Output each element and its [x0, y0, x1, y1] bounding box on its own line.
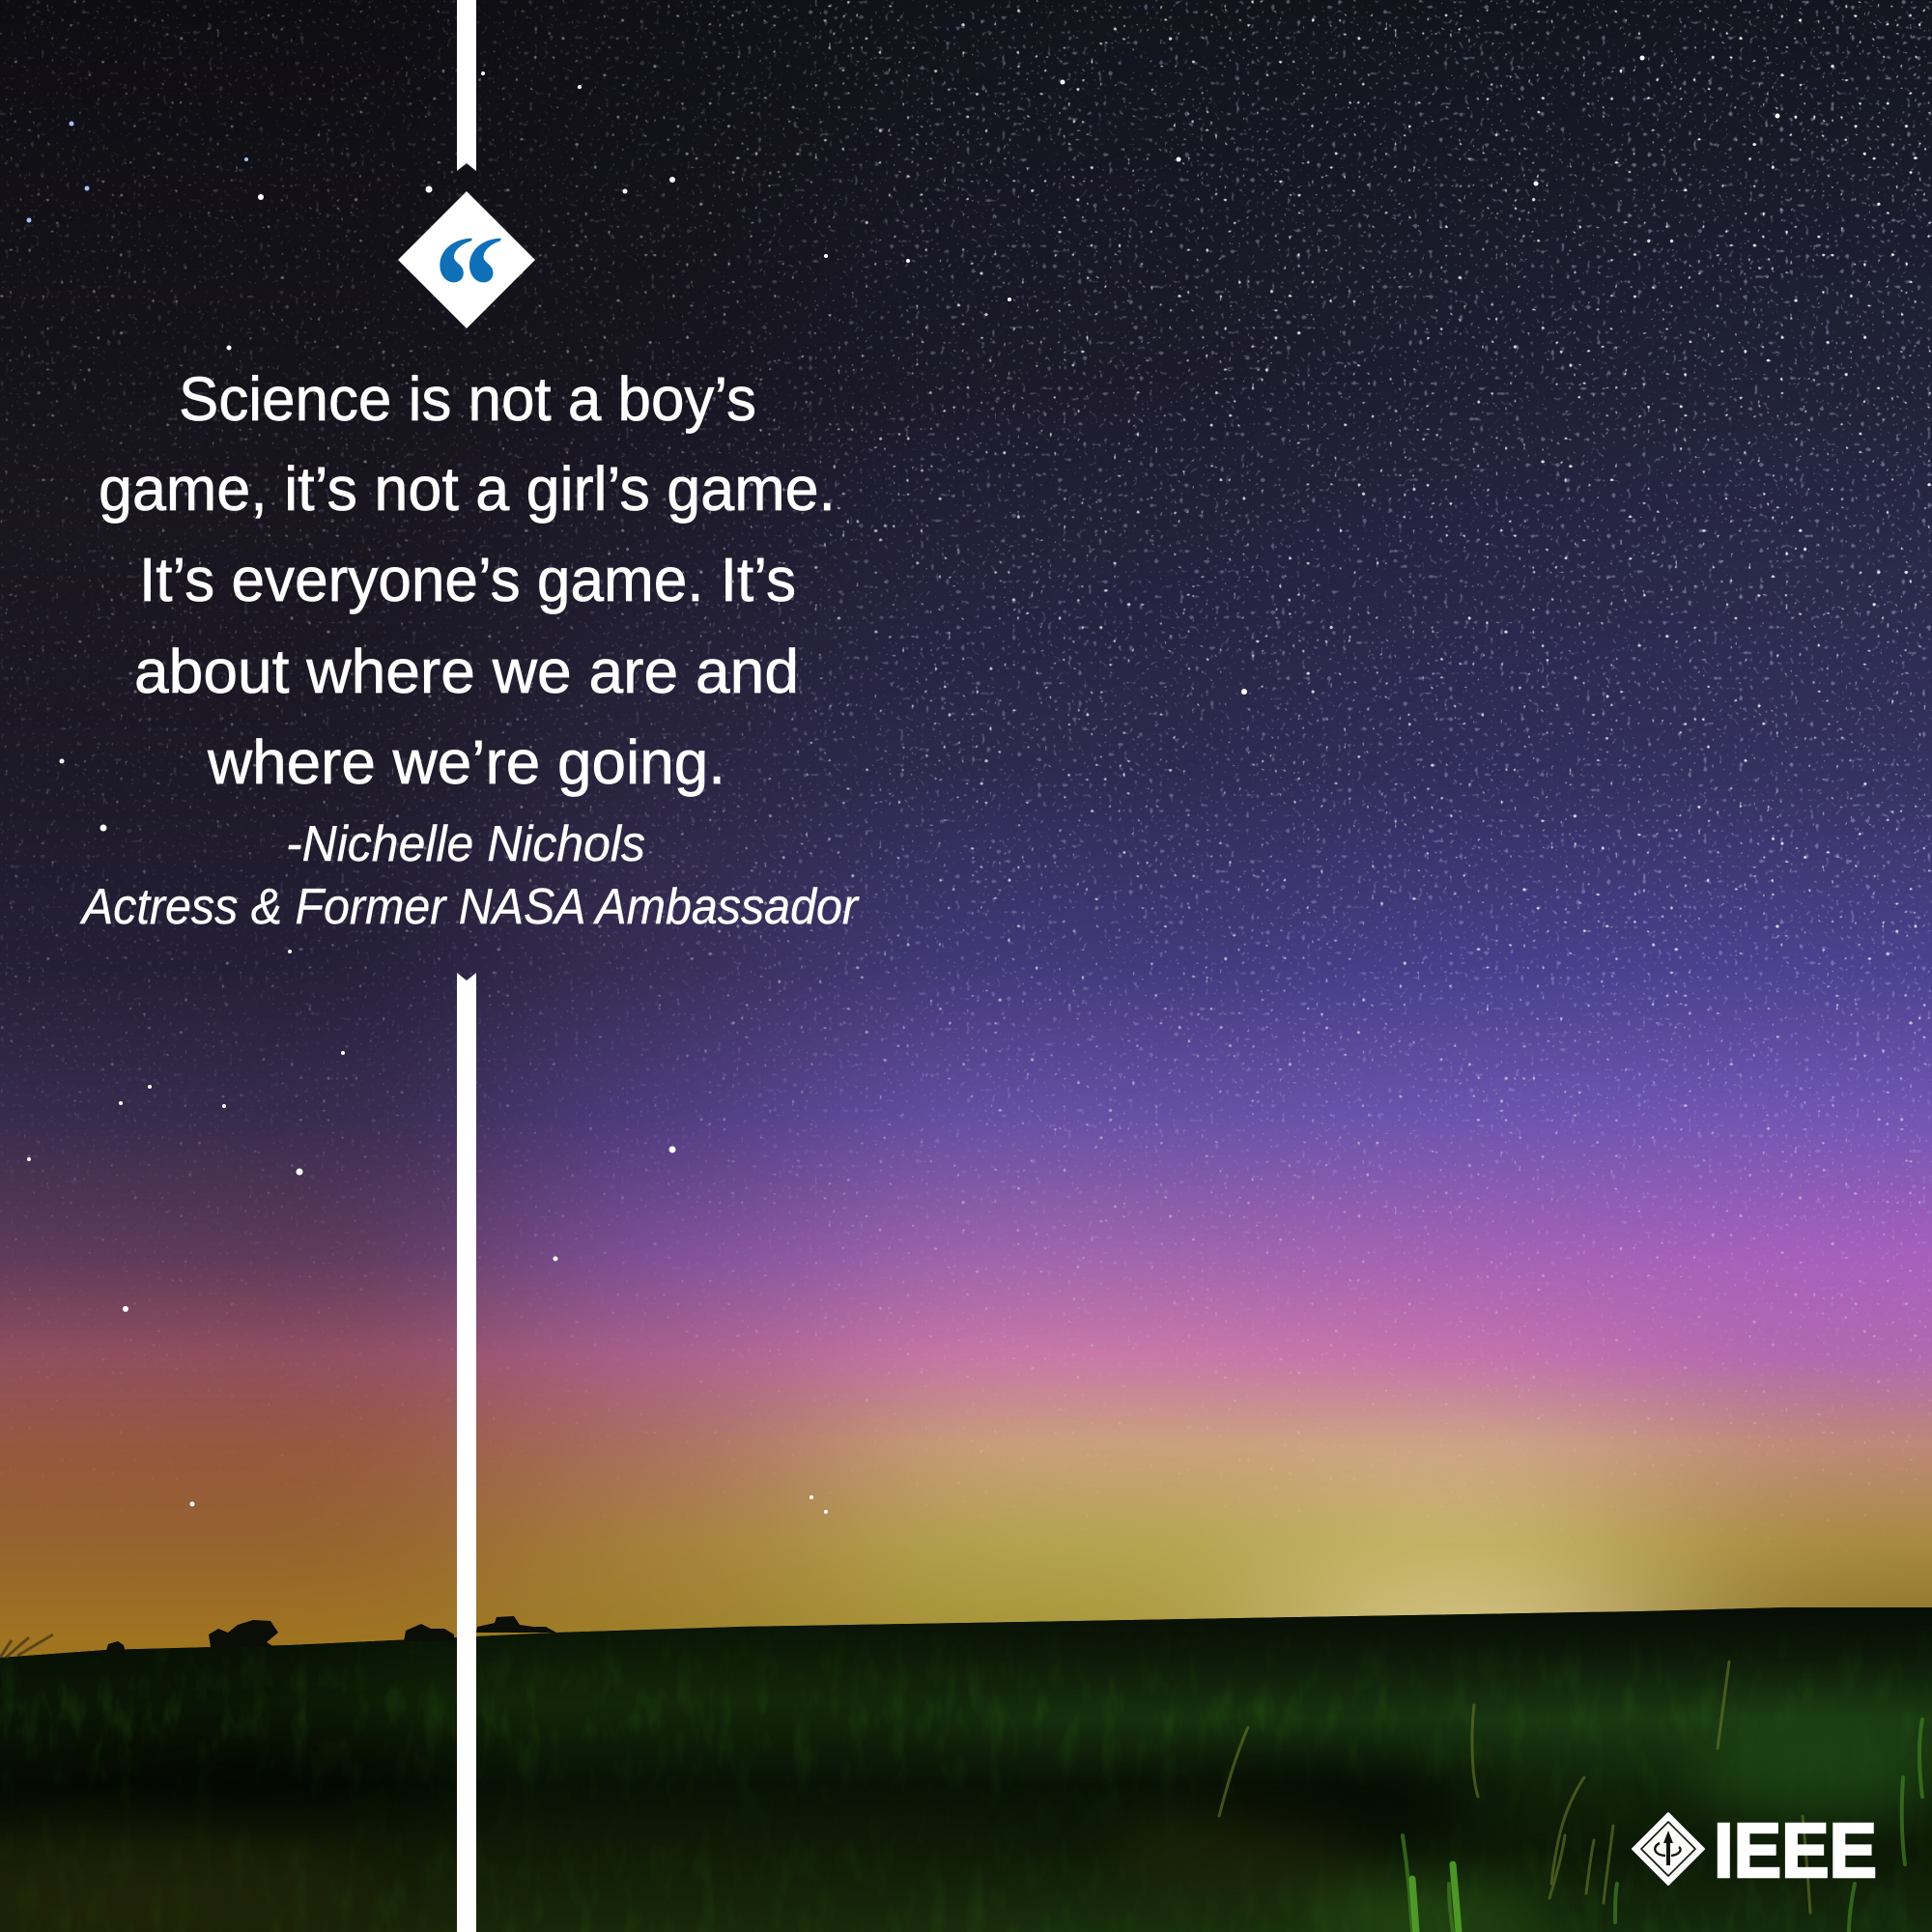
light and shadow patches in the grass [315, 1727, 1932, 1932]
quote text: It’s everyone’s game. It’s [139, 545, 796, 614]
ground: dark field [0, 1594, 1932, 1932]
vertical line: top segment [457, 0, 476, 171]
vertical line: bottom segment [457, 973, 476, 1932]
quote text: game, it’s not a girl’s game. [99, 454, 836, 524]
IEEE logo [1633, 1807, 1877, 1893]
grass blades [1219, 1662, 1922, 1932]
attribution [79, 816, 860, 935]
quote text: where we’re going. [207, 727, 725, 797]
quote text: Science is not a boy’s [179, 364, 756, 434]
icon: quote diamond [398, 191, 535, 328]
icon: IEEE emblem [1633, 1813, 1704, 1885]
quote text: about where we are and [134, 637, 799, 706]
attribution: -Nichelle Nichols [286, 816, 645, 872]
tree silhouettes on horizon [0, 1616, 556, 1658]
wordmark: IEEE [1714, 1807, 1877, 1893]
quote text [99, 364, 836, 797]
attribution: Actress & Former NASA Ambassador [79, 879, 860, 935]
bright stars [27, 56, 1779, 1514]
